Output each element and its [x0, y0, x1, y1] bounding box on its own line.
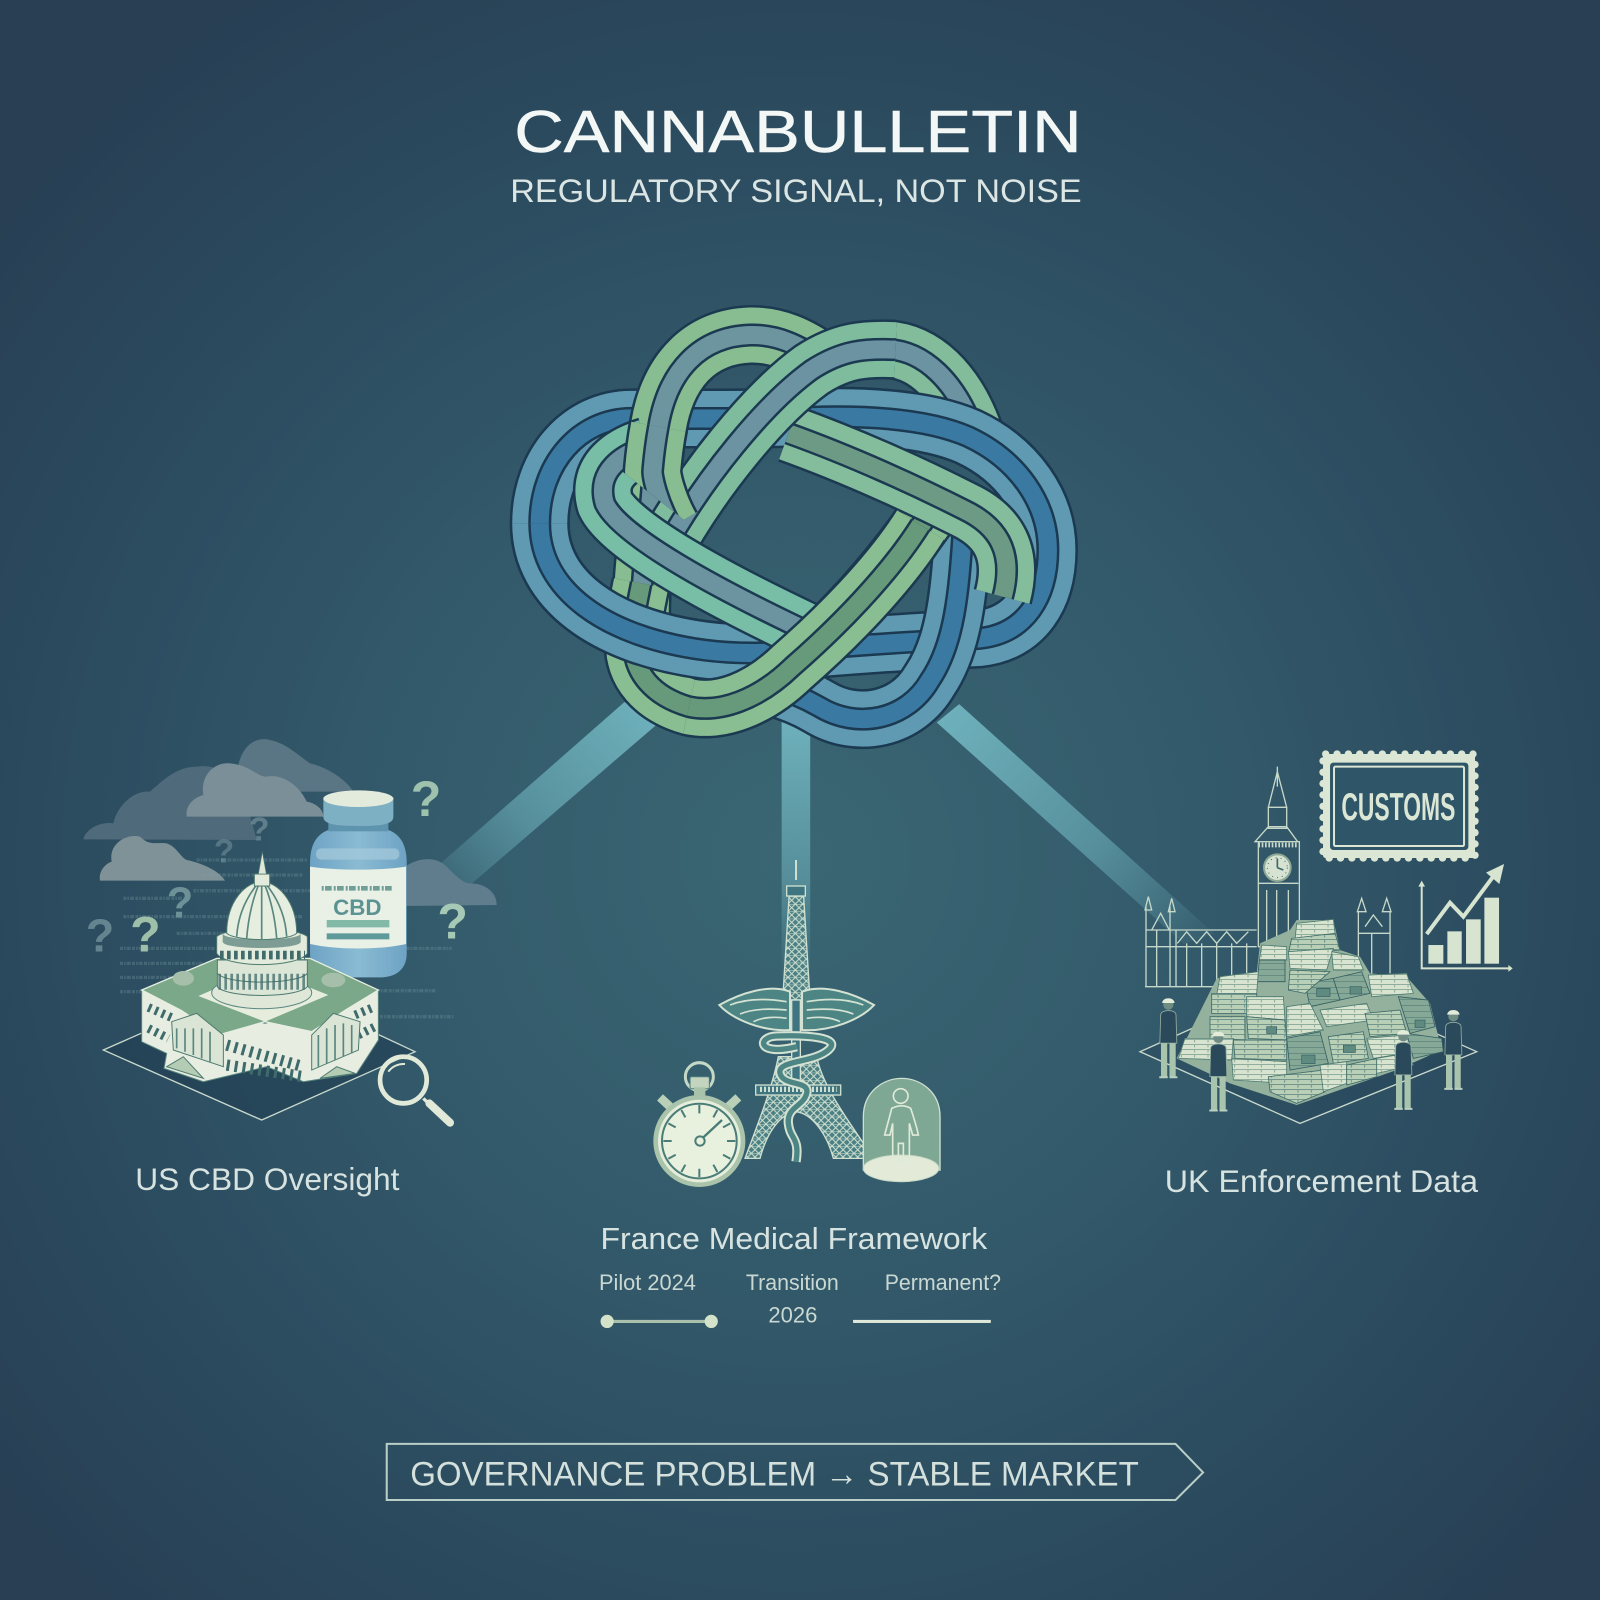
question marks: ? [249, 812, 270, 849]
label: France Medical Framework: France Medical Framework [601, 1222, 988, 1256]
knot strand: blue oval lower left overlap [540, 523, 788, 653]
label: UK Enforcement Data: UK Enforcement Data [1165, 1163, 1478, 1199]
faint document text [120, 860, 453, 1017]
label: US CBD Oversight: US CBD Oversight [135, 1161, 400, 1197]
ground plane [103, 980, 415, 1120]
worker 1 [1159, 998, 1177, 1077]
knot strand: green diagonal to the right [788, 433, 1007, 597]
timeline segment: pilot [601, 1315, 718, 1328]
Big Ben clock tower [1255, 767, 1299, 947]
panel: US CBD oversight illustration [83, 739, 497, 1123]
question marks: ? [214, 834, 234, 871]
Eiffel tower [745, 860, 873, 1158]
knot strand: blue oval upper right overlap [808, 417, 1048, 550]
connector rays [424, 702, 1214, 980]
label: pilot 2024: Pilot 2024 [599, 1270, 696, 1295]
label: permanent: Permanent? [885, 1270, 1001, 1295]
CBD bottle: CBD [333, 895, 382, 920]
central knot [540, 335, 1048, 719]
question marks: ? [411, 771, 441, 827]
panel: UK enforcement illustration [1140, 754, 1513, 1123]
worker 4 [1444, 1010, 1462, 1089]
knot strand: right blue descending band [704, 537, 963, 719]
timeline segment: permanent [853, 1320, 991, 1323]
knot strand: main diagonal front [662, 349, 896, 553]
capitol building [142, 852, 378, 1082]
customs stamp: CUSTOMS [1341, 785, 1455, 829]
ground plane [1140, 1023, 1477, 1123]
worker 3 [1394, 1030, 1412, 1109]
timeline: France pathway [599, 1270, 1001, 1328]
knot strand: top left loop over curl [653, 427, 672, 527]
customs workers [1159, 998, 1462, 1111]
magnifying glass [380, 1057, 450, 1123]
label: transition: Transition [746, 1270, 839, 1295]
stopwatch [656, 1063, 743, 1185]
question marks: ? [437, 893, 468, 949]
worker 2 [1209, 1032, 1227, 1111]
label: 2026: 2026 [768, 1302, 817, 1327]
question marks [86, 771, 468, 963]
panel: France medical framework illustration [656, 860, 940, 1185]
Houses of Parliament [1145, 897, 1391, 987]
knot strand: top right loop rear [888, 349, 976, 437]
bottom arrow banner [387, 1444, 1203, 1500]
knot strand: lower green band [633, 490, 945, 708]
customs stamp [1323, 754, 1475, 858]
bar chart [1418, 864, 1513, 972]
knot strand: lower green band front [689, 525, 920, 708]
question marks: ? [130, 907, 161, 963]
patient under glass dome [863, 1078, 940, 1182]
banner outline [387, 1444, 1203, 1500]
question marks: ? [86, 910, 114, 962]
subtitle: REGULATORY SIGNAL, NOT NOISE [510, 172, 1082, 209]
knot strand: teal left curl [603, 447, 811, 633]
caduceus wings and serpent [719, 989, 874, 1162]
knot strand: top left green loop [641, 335, 823, 617]
title: CANNABULLETIN [514, 98, 1082, 165]
question marks: ? [167, 879, 193, 927]
CBD bottle [310, 790, 407, 977]
knot strand: blue oval [540, 417, 1048, 653]
banner text: GOVERNANCE PROBLEM → STABLE MARKET [410, 1456, 1139, 1494]
seized goods pile [1177, 919, 1443, 1105]
clouds [83, 739, 497, 906]
